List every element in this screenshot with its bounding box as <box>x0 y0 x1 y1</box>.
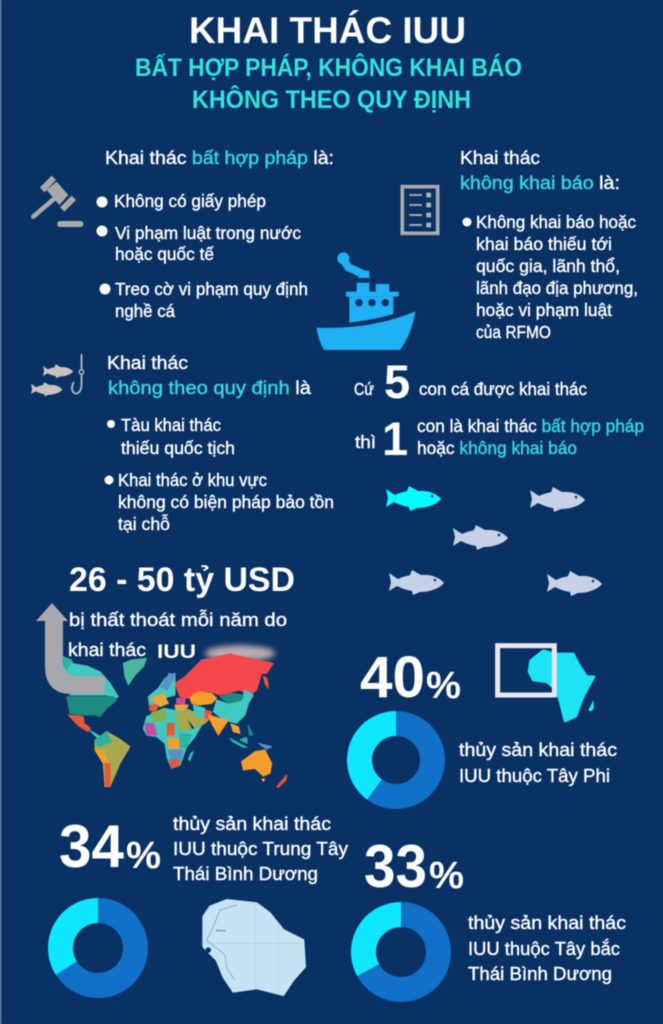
caption: Thái Bình Dương <box>173 863 318 884</box>
heading <box>460 147 620 193</box>
bullet list: Treo cờ vi phạm quy định <box>115 279 308 299</box>
bullet text <box>462 212 638 342</box>
line: five fish: con cá được khai thác <box>419 379 587 399</box>
icon: Pacific map: Mariana <box>216 929 226 933</box>
bullet list <box>104 415 334 534</box>
bullet text: hoặc vi phạm luật <box>476 300 612 320</box>
description IUU: IUU <box>157 642 196 663</box>
line: one illegal: con là khai thác bất hợp pháp <box>417 416 644 436</box>
heading: không theo quy định là <box>108 377 312 398</box>
eurasia africa oceania <box>143 645 287 787</box>
description line 2: khai thác <box>68 639 146 660</box>
caption <box>468 912 626 984</box>
bullet text: lãnh đạo địa phương, <box>476 278 638 298</box>
subtitle line 2: KHÔNG THEO QUY ĐỊNH <box>192 84 471 114</box>
bullet text: quốc gia, lãnh thổ, <box>476 256 620 276</box>
bullet text: của RFMO <box>476 322 551 342</box>
icon: Africa map <box>498 646 594 721</box>
big percent <box>59 813 161 880</box>
description line 1: bị thất thoát mỗi năm do <box>69 609 287 630</box>
line: one illegal: hoặc không khai báo <box>417 438 577 458</box>
panel: economic loss <box>68 561 295 663</box>
icon: fish <box>547 571 602 596</box>
caption: IUU thuộc Trung Tây <box>173 838 349 859</box>
bullet list <box>96 191 308 321</box>
panel: West Africa 40% <box>345 645 617 811</box>
fish row illustration <box>386 486 602 596</box>
big percent <box>360 645 461 710</box>
big percent: 33 <box>364 833 427 900</box>
line: one illegal: thì <box>355 432 376 452</box>
bullet list: Tàu khai thác <box>121 415 221 435</box>
caption <box>173 813 349 884</box>
icon: fish <box>530 487 585 512</box>
icon: fish and hook <box>31 354 84 396</box>
bullet list: không có biện pháp bảo tồn <box>118 492 334 512</box>
caption: IUU thuộc Tây Phi <box>459 765 610 786</box>
heading: Khai thác <box>107 352 188 373</box>
icon: fish <box>389 570 444 595</box>
heading <box>107 352 312 398</box>
big percent: % <box>429 855 464 897</box>
bullet list: Khai thác ở khu vực <box>118 470 267 490</box>
caption: IUU thuộc Tây bắc <box>468 938 620 959</box>
world map <box>63 645 287 787</box>
bullet list: thiếu quốc tịch <box>121 438 235 458</box>
donut chart <box>46 896 150 1000</box>
big percent: % <box>426 665 461 707</box>
americas <box>63 657 147 787</box>
caption: thủy sản khai thác <box>173 813 331 834</box>
panel: unreported fishing <box>402 147 638 342</box>
line: five fish: Cứ <box>354 379 374 399</box>
title <box>135 10 522 114</box>
heading: Khai thác bất hợp pháp là: <box>105 147 334 168</box>
panel: unregulated fishing <box>31 352 334 534</box>
caption: thủy sản khai thác <box>468 912 626 933</box>
big percent: 34 <box>59 813 125 880</box>
bullet list: Vi phạm luật trong nước <box>115 223 301 243</box>
icon: fish <box>453 525 508 550</box>
heading: Khai thác <box>460 147 540 168</box>
donut chart <box>350 901 452 1003</box>
bullet list: nghề cá <box>115 301 175 321</box>
panel: Northwest Pacific 33% <box>350 833 626 1003</box>
icon: ship <box>317 252 415 350</box>
line: five fish <box>354 355 587 408</box>
line: five fish: 5 <box>384 355 410 408</box>
bullet list: hoặc quốc tế <box>115 244 214 264</box>
bullet list: Không có giấy phép <box>114 191 266 211</box>
icon: Pacific map <box>203 900 305 995</box>
arrow <box>36 603 105 694</box>
panel: Western Central Pacific 34% <box>46 813 349 1000</box>
donut chart <box>345 709 447 811</box>
icon: cyan fish <box>386 486 441 511</box>
bullet list: tại chỗ <box>118 513 170 534</box>
caption: thủy sản khai thác <box>459 739 617 760</box>
big number: 26 - 50 tỷ USD <box>69 561 295 599</box>
icon: document list <box>402 187 438 233</box>
big percent <box>364 833 464 900</box>
panel: one in five fish <box>354 355 644 596</box>
big percent: 40 <box>360 645 425 710</box>
big percent: % <box>126 835 161 877</box>
line: one illegal <box>355 412 644 465</box>
caption: Thái Bình Dương <box>468 963 612 984</box>
icon: gavel <box>33 176 83 227</box>
panel: illegal fishing <box>33 147 334 321</box>
line: one illegal: 1 <box>382 412 408 465</box>
subtitle line 1: BẤT HỢP PHÁP, KHÔNG KHAI BÁO <box>135 52 522 82</box>
heading: không khai báo là: <box>460 172 620 193</box>
caption <box>459 739 617 786</box>
bullet text: khai báo thiếu tới <box>476 234 612 254</box>
bullet text: Không khai báo hoặc <box>476 212 636 232</box>
main heading: KHAI THÁC IUU <box>189 10 466 51</box>
